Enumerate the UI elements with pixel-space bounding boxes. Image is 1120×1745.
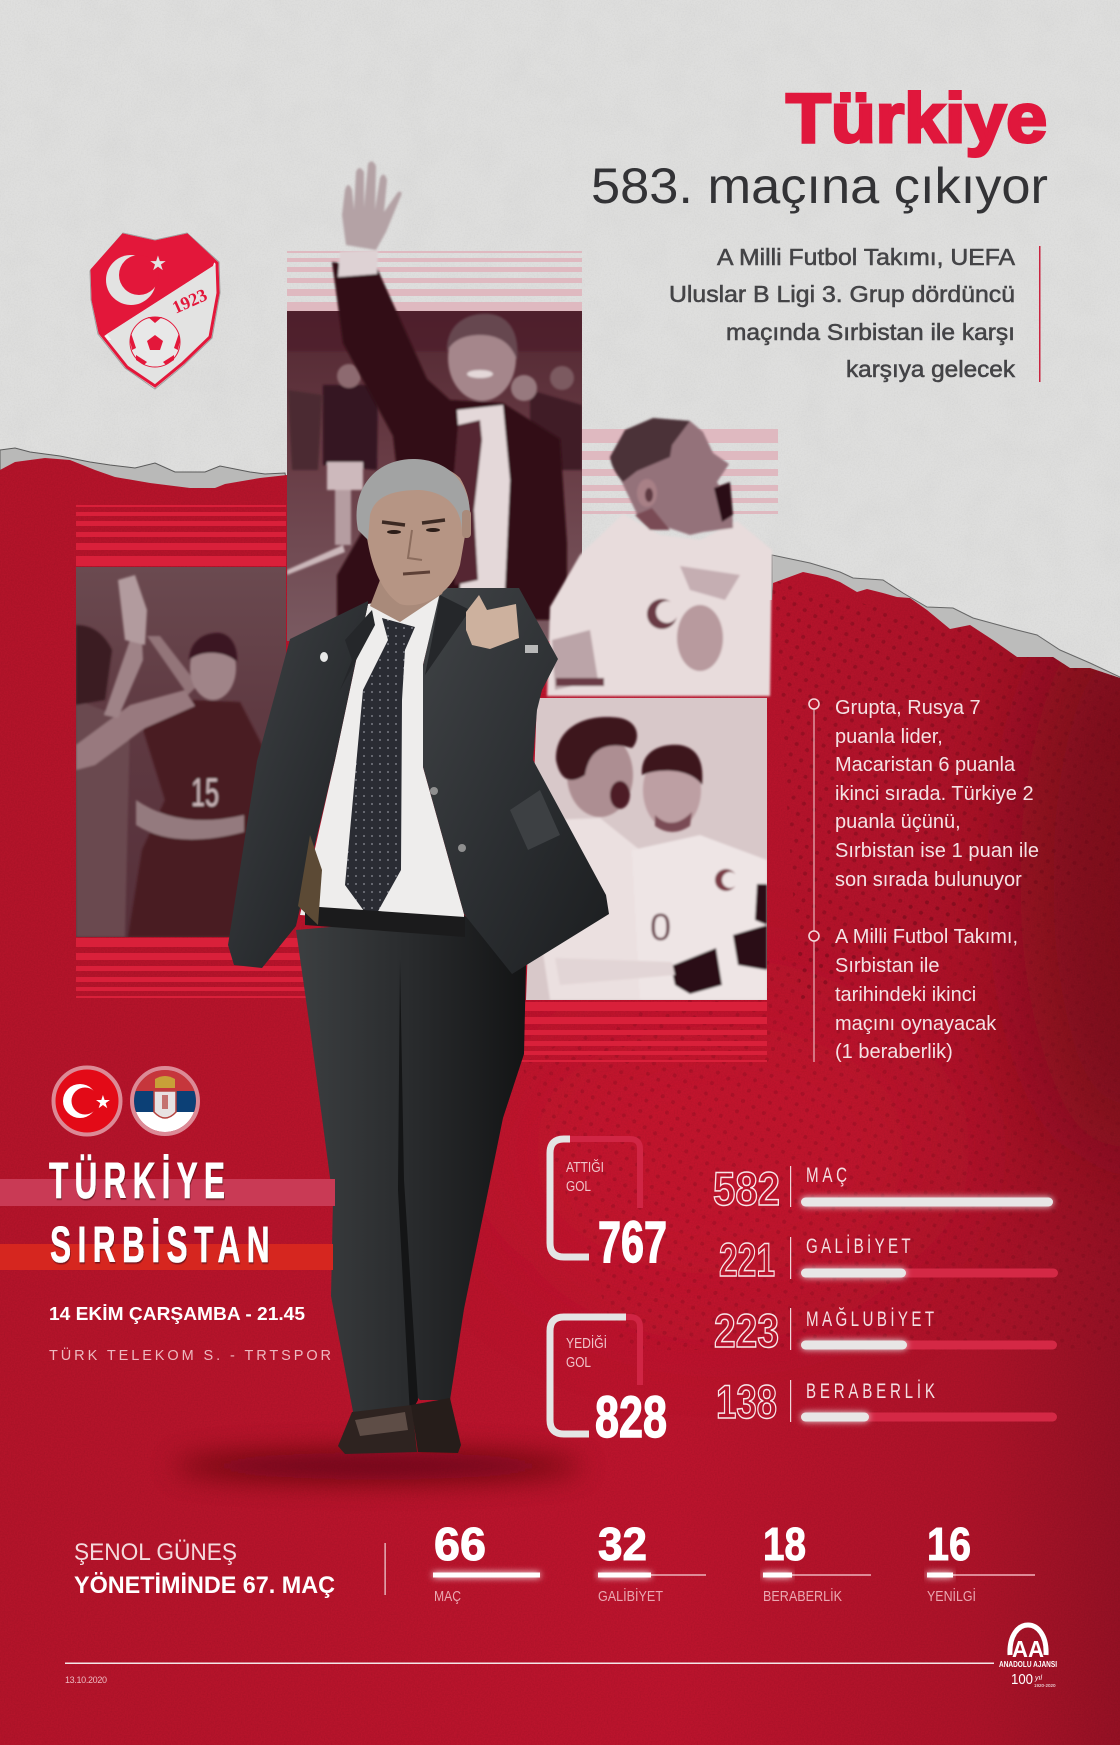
stripes behind Burak photo: [582, 429, 778, 514]
photo: players celebrating, right: [526, 698, 767, 1000]
coach stat: wins: [598, 1518, 706, 1605]
goals scored bracket: 767: [598, 1210, 667, 1275]
intro text: [669, 244, 1040, 382]
right info text with bullets: puanla üçünü,: [835, 811, 961, 833]
stat: losses 223: [714, 1304, 1057, 1357]
stat: wins 221: 221: [719, 1233, 775, 1286]
icon: Turkish football federation crest: [90, 232, 220, 390]
match date and venue: 14 EKİM ÇARŞAMBA - 21.45: [49, 1304, 305, 1324]
stripes below right photo: [515, 1002, 767, 1062]
stat: draws 138: BERABERLİK: [806, 1378, 939, 1403]
coach stat: losses: YENİLGİ: [927, 1587, 976, 1605]
stripes above left photo: [76, 505, 286, 566]
photo: Burak celebrating: [547, 418, 772, 696]
right info text with bullets: Macaristan 6 puanla: [835, 754, 1016, 776]
icon: Turkish flag: ★: [95, 1092, 111, 1113]
match date and venue: [49, 1304, 331, 1364]
coach stat: draws: [763, 1518, 871, 1605]
right info text with bullets: puanla lider,: [835, 726, 943, 748]
coach stat: losses: [927, 1518, 1035, 1605]
right info text with bullets: Sırbistan ile: [835, 955, 940, 977]
logo: Anadolu Ajansı: AA: [1012, 1636, 1044, 1662]
right info text with bullets: tarihindeki ikinci: [835, 984, 976, 1006]
photo: players celebrating, left: 15: [191, 771, 219, 815]
stripes below left photo: [76, 938, 306, 998]
coach stat: matches: [433, 1518, 540, 1605]
stat: losses 223: MAĞLUBİYET: [806, 1306, 938, 1331]
title: [591, 79, 1048, 214]
logo: Anadolu Ajansı: 100: [1011, 1671, 1033, 1688]
goals conceded bracket: 828: [595, 1385, 667, 1450]
title: Türkiye: [786, 79, 1047, 157]
coach stat: wins: 32: [598, 1518, 647, 1570]
logo: Anadolu Ajansı: 1920-2020: [1034, 1683, 1056, 1688]
right info text with bullets: [809, 697, 1039, 1063]
right info text with bullets: Sırbistan ise 1 puan ile: [835, 840, 1039, 862]
right info text with bullets: (1 beraberlik): [835, 1041, 953, 1063]
icon: Turkish football federation crest: ★: [149, 251, 167, 275]
photo: players celebrating, right: 0: [650, 907, 671, 949]
stat: draws 138: [716, 1375, 1057, 1428]
footer rule and date: 13.10.2020: [65, 1675, 107, 1685]
logo: Anadolu Ajansı: yıl: [1034, 1675, 1042, 1682]
right info text with bullets: A Milli Futbol Takımı,: [835, 926, 1018, 948]
coach heading: ŞENOL GÜNEŞ: [74, 1539, 237, 1566]
stat: matches 582: MAÇ: [806, 1162, 851, 1187]
logo: Anadolu Ajansı: ANADOLU AJANSI: [999, 1660, 1057, 1669]
icon: Serbian flag: [130, 1068, 200, 1136]
right info text with bullets: ikinci sırada. Türkiye 2: [835, 783, 1034, 805]
coach stat: wins: GALİBİYET: [598, 1587, 663, 1605]
coach stat: matches: 66: [434, 1518, 486, 1570]
goals conceded bracket: [550, 1317, 667, 1450]
photo: players celebrating, left: [76, 567, 286, 937]
goals scored bracket: ATTIĞI: [566, 1159, 604, 1176]
title: 583. maçına çıkıyor: [591, 158, 1048, 214]
right info text with bullets: son sırada bulunuyor: [835, 869, 1022, 891]
match band: teams: TÜRKİYE: [49, 1152, 231, 1209]
icon: Turkish flag: [54, 1068, 120, 1134]
stat: wins 221: [719, 1233, 1058, 1286]
goals conceded bracket: YEDİĞİ: [566, 1334, 607, 1352]
intro text: maçında Sırbistan ile karşı: [726, 319, 1015, 345]
match band: teams: SIRBİSTAN: [50, 1216, 276, 1273]
stat: matches 582: [713, 1162, 1053, 1215]
coach stat: draws: 18: [763, 1518, 806, 1570]
shadow under main figure: [173, 1452, 583, 1480]
icon: Turkish football federation crest: 1923: [169, 285, 210, 318]
figure: Şenol Güneş walking: [228, 459, 609, 1454]
stripes behind top photo: [287, 251, 582, 311]
right info text with bullets: Grupta, Rusya 7: [835, 697, 981, 719]
stat: matches 582: 582: [713, 1162, 780, 1215]
photo: Şenol Güneş waving: [287, 161, 582, 641]
intro text: Uluslar B Ligi 3. Grup dördüncü: [669, 281, 1015, 307]
logo: Anadolu Ajansı: [999, 1625, 1057, 1688]
goals conceded bracket: GOL: [566, 1354, 591, 1371]
stat: draws 138: 138: [716, 1375, 777, 1428]
coach heading: YÖNETİMİNDE 67. MAÇ: [74, 1572, 335, 1599]
goals scored bracket: GOL: [566, 1178, 591, 1195]
match date and venue: TÜRK TELEKOM S. - TRTSPOR: [49, 1346, 331, 1364]
coach stat: matches: MAÇ: [434, 1588, 461, 1605]
coach heading: [74, 1539, 386, 1599]
intro text: karşıya gelecek: [846, 356, 1016, 382]
intro text: A Milli Futbol Takımı, UEFA: [717, 244, 1016, 270]
stat: wins 221: GALİBİYET: [806, 1233, 914, 1258]
coach stat: losses: 16: [927, 1518, 971, 1570]
match band: teams: [0, 1152, 335, 1273]
coach stat: draws: BERABERLİK: [763, 1587, 842, 1605]
right info text with bullets: maçını oynayacak: [835, 1013, 997, 1035]
stat: losses 223: 223: [714, 1304, 779, 1357]
goals scored bracket: [550, 1139, 667, 1275]
